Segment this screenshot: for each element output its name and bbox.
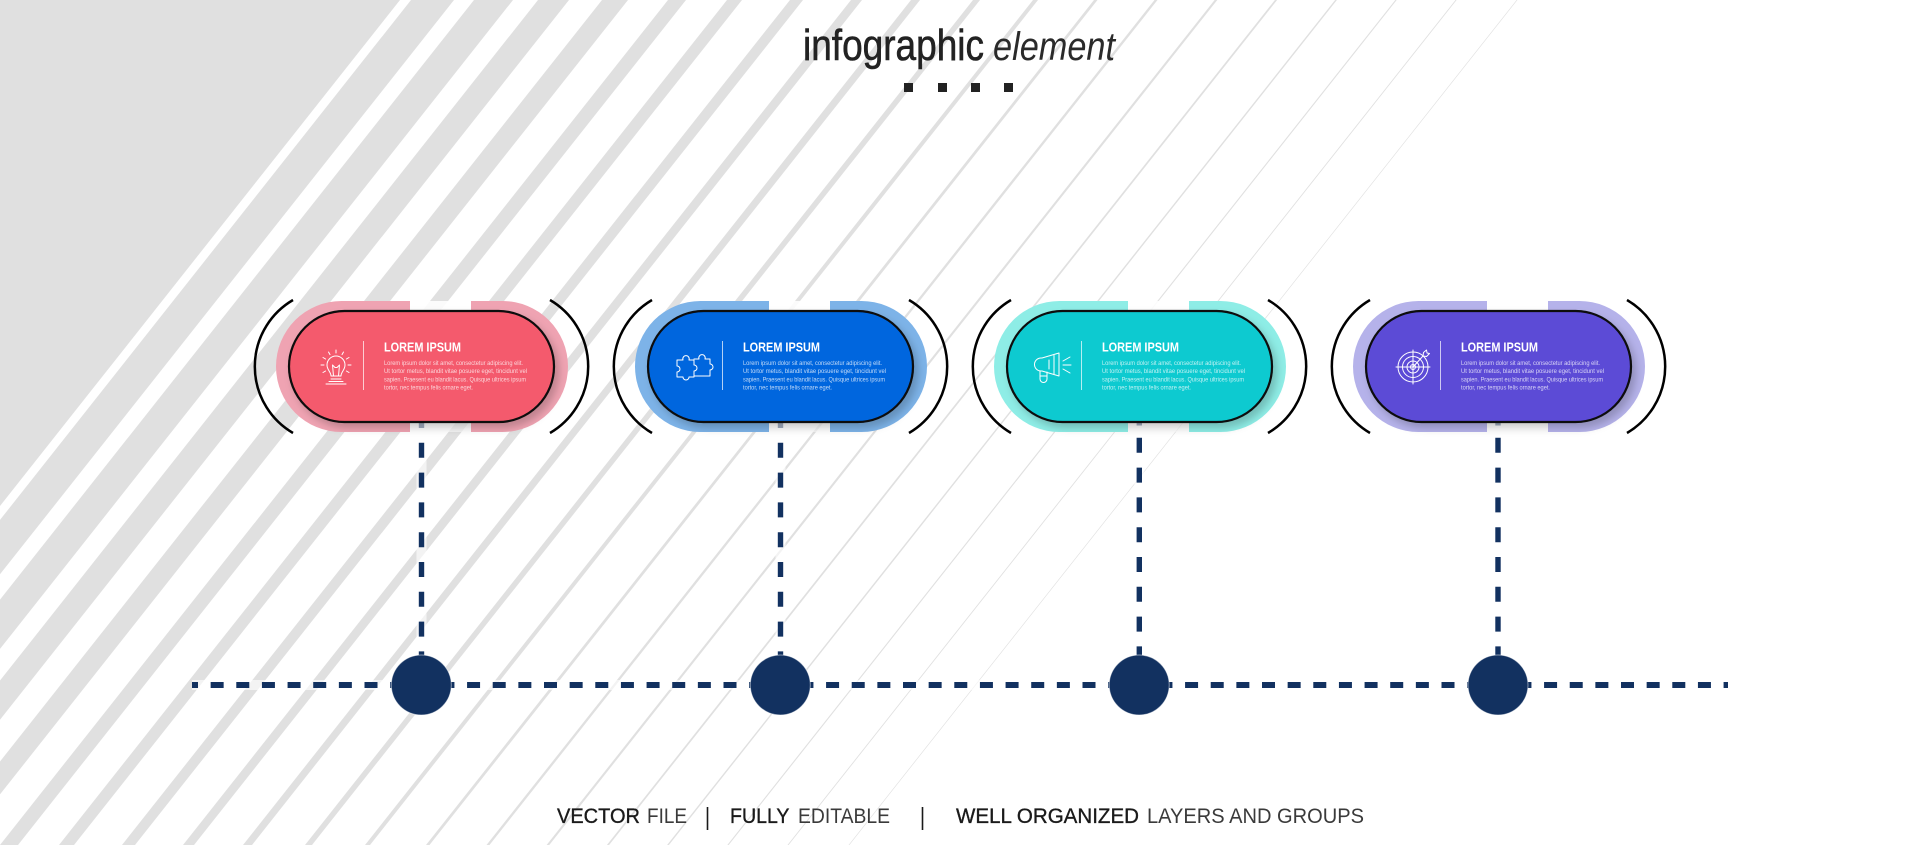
body text: sapien. Praesent eu blandit lacus. Quisque ultrices ipsum — [1461, 376, 1603, 383]
background diagonal stripes — [0, 0, 1517, 845]
icon: light bulb — [321, 350, 351, 384]
title dots — [904, 83, 1013, 92]
footer text: FILE — [647, 805, 687, 828]
horizontal dashed timeline — [192, 680, 1728, 690]
timeline node 3 — [1109, 655, 1169, 715]
title: element: element — [993, 25, 1117, 69]
heading: LOREM IPSUM — [1461, 340, 1538, 354]
divider — [362, 341, 364, 390]
heading: LOREM IPSUM — [743, 340, 820, 354]
vertical dashed connectors — [422, 408, 1498, 657]
body text: tortor, nec tempus felis ornare eget. — [384, 385, 473, 392]
body text: Lorem ipsum dolor sit amet, consectetur adipiscing elit. — [384, 360, 523, 367]
body text — [384, 360, 527, 392]
divider — [1080, 341, 1082, 390]
body text: sapien. Praesent eu blandit lacus. Quisque ultrices ipsum — [743, 376, 885, 383]
body text: Ut tortor metus, blandit vitae posuere eget, tincidunt vel — [1102, 368, 1245, 375]
body text: tortor, nec tempus felis ornare eget. — [1461, 385, 1550, 392]
footer text: LAYERS AND GROUPS — [1147, 805, 1364, 828]
body text — [1461, 360, 1604, 392]
icon: puzzle — [677, 355, 713, 380]
footer text: WELL ORGANIZED — [956, 805, 1139, 828]
icon: target — [1396, 350, 1430, 384]
body text: sapien. Praesent eu blandit lacus. Quisque ultrices ipsum — [1102, 376, 1244, 383]
footer text — [557, 805, 1364, 830]
body text: sapien. Praesent eu blandit lacus. Quisque ultrices ipsum — [384, 376, 526, 383]
timeline node 1 — [391, 655, 451, 715]
footer text: FULLY — [730, 805, 790, 828]
body text: Lorem ipsum dolor sit amet, consectetur adipiscing elit. — [1102, 360, 1241, 367]
timeline node 4 — [1468, 655, 1528, 715]
body text: Lorem ipsum dolor sit amet, consectetur adipiscing elit. — [1461, 360, 1600, 367]
panel: step 1 red — [255, 300, 588, 433]
heading: LOREM IPSUM — [384, 340, 461, 354]
body text: tortor, nec tempus felis ornare eget. — [743, 385, 832, 392]
footer text: VECTOR — [557, 805, 640, 828]
title: infographic: infographic — [803, 21, 984, 70]
body text: Lorem ipsum dolor sit amet, consectetur adipiscing elit. — [743, 360, 882, 367]
body text: Ut tortor metus, blandit vitae posuere eget, tincidunt vel — [743, 368, 886, 375]
body text — [743, 360, 886, 392]
panel: step 4 purple — [1332, 300, 1665, 433]
body text: tortor, nec tempus felis ornare eget. — [1102, 385, 1191, 392]
heading: LOREM IPSUM — [1102, 340, 1179, 354]
divider — [1440, 341, 1442, 390]
body text — [1102, 360, 1245, 392]
panel: step 2 blue — [614, 300, 947, 433]
body text: Ut tortor metus, blandit vitae posuere eget, tincidunt vel — [384, 368, 527, 375]
panel: step 3 teal — [973, 300, 1306, 433]
divider — [722, 341, 724, 390]
icon: megaphone — [1034, 353, 1071, 383]
timeline node 2 — [750, 655, 810, 715]
footer text: EDITABLE — [798, 805, 890, 828]
title — [803, 21, 1117, 70]
body text: Ut tortor metus, blandit vitae posuere eget, tincidunt vel — [1461, 368, 1604, 375]
